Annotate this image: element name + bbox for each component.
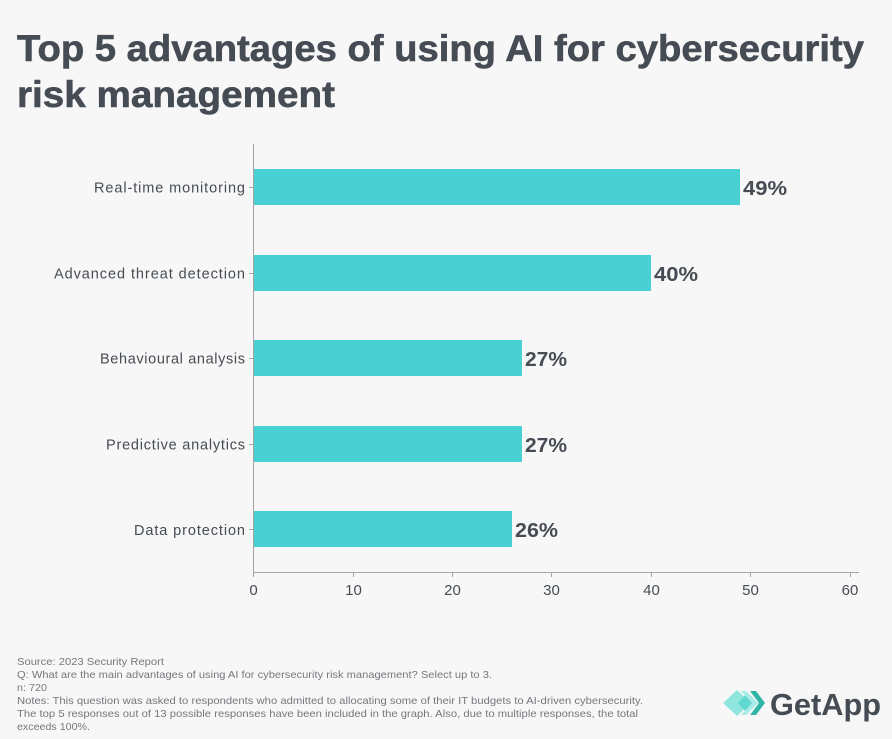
x axis tick labels: 50: [742, 582, 759, 599]
value labels: 27%: [525, 349, 567, 371]
x axis tick labels: 20: [444, 582, 461, 599]
title: risk management: [17, 74, 335, 115]
x axis tick labels: [249, 582, 858, 599]
title: [17, 28, 864, 115]
category labels: Advanced threat detection: [54, 266, 245, 282]
bars: [253, 169, 740, 547]
x axis tick labels: 30: [543, 582, 560, 599]
source notes: [17, 656, 643, 733]
axes: [249, 144, 859, 577]
GetApp logo: [723, 687, 881, 722]
source notes: exceeds 100%.: [17, 721, 90, 733]
x axis tick labels: 60: [842, 582, 858, 599]
x axis tick labels: 10: [345, 582, 362, 599]
x axis tick labels: 0: [249, 582, 258, 599]
source notes: The top 5 responses out of 13 possible responses have been included in the graph. Also, due to multiple responses, the total: [17, 708, 638, 720]
category labels: Data protection: [134, 523, 245, 539]
bar chart: [54, 144, 859, 599]
x axis tick labels: 40: [643, 582, 660, 599]
icon: logo diamonds: [723, 690, 765, 716]
source notes: Notes: This question was asked to respondents who admitted to allocating some of their IT budgets to AI-driven cybersecurity.: [17, 695, 643, 707]
value labels: 49%: [743, 178, 787, 200]
category labels: Predictive analytics: [106, 438, 245, 454]
value labels: 40%: [654, 264, 698, 286]
value labels: 26%: [515, 520, 558, 542]
source notes: Q: What are the main advantages of using AI for cybersecurity risk management? Select up to 3.: [17, 669, 492, 681]
value labels: 27%: [525, 435, 567, 457]
logo wordmark: GetApp: [770, 687, 881, 722]
source notes: Source: 2023 Security Report: [17, 656, 164, 668]
title: Top 5 advantages of using AI for cybersecurity: [17, 28, 864, 69]
category labels: Real-time monitoring: [94, 180, 245, 196]
category labels: [54, 180, 245, 539]
source notes: n: 720: [17, 682, 47, 694]
category labels: Behavioural analysis: [100, 352, 245, 368]
value labels: [515, 178, 787, 542]
